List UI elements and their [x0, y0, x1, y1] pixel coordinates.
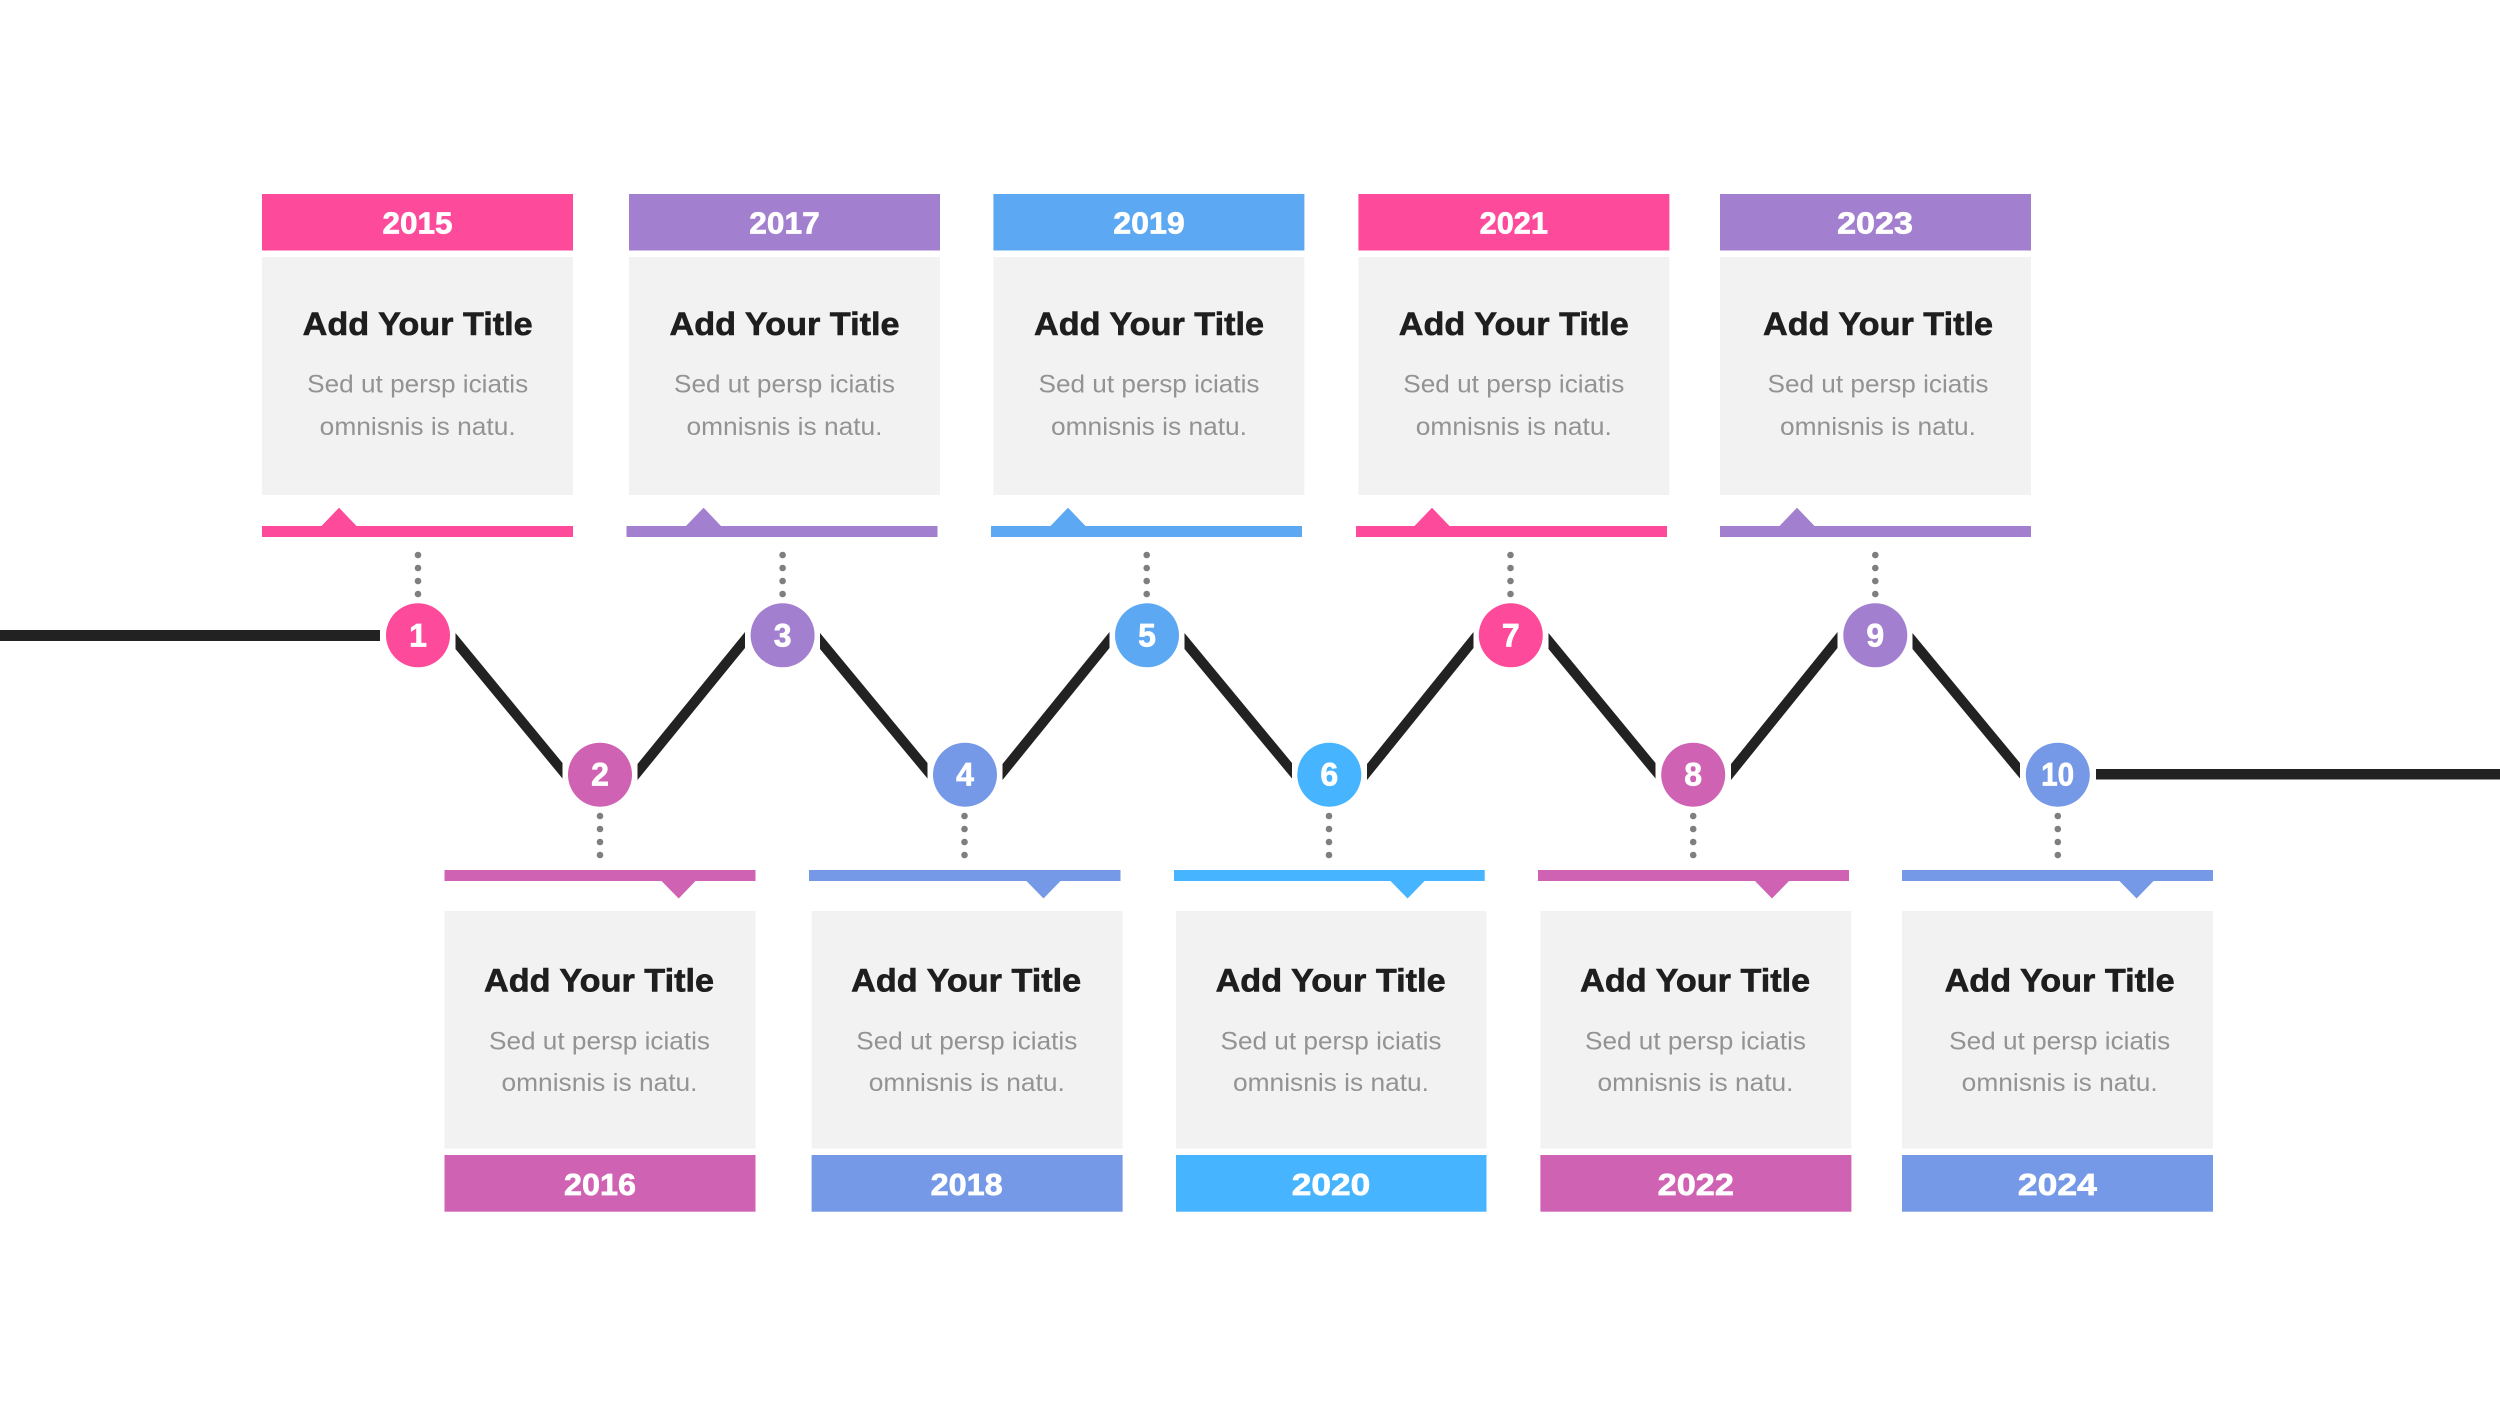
pointer bar 2016 [444, 870, 756, 898]
year header 2017 [629, 194, 940, 250]
year header 2021: 2021 [1480, 205, 1548, 240]
text panel 2021: omnisnis is natu. [1416, 413, 1612, 441]
year header 2016: 2016 [564, 1167, 636, 1202]
text panel 2016: Sed ut persp iciatis [489, 1027, 710, 1055]
text panel 2021: Sed ut persp iciatis [1403, 371, 1624, 399]
text panel 2015 [262, 257, 573, 495]
text panel 2017 [629, 257, 940, 495]
card 2022 [1538, 870, 1851, 1212]
marker 2 [568, 743, 632, 858]
year header 2021 [1358, 194, 1669, 250]
text panel 2015: omnisnis is natu. [320, 413, 516, 441]
card 2021 [1356, 194, 1669, 537]
timeline zigzag line [0, 630, 2500, 780]
text panel 2020 [1176, 911, 1486, 1148]
pointer bar 2019 [991, 508, 1302, 537]
marker 5 [1115, 552, 1179, 667]
pointer bar 2020 [1174, 870, 1485, 898]
text panel 2023: Add Your Title [1763, 306, 1993, 342]
marker 6 [1297, 743, 1361, 858]
text panel 2021: Add Your Title [1399, 306, 1629, 342]
pointer bar 2021 [1356, 508, 1667, 537]
text panel 2015: Sed ut persp iciatis [307, 371, 528, 399]
text panel 2023 [1720, 257, 2031, 495]
year header 2020 [1176, 1155, 1486, 1212]
text panel 2016 [444, 911, 756, 1148]
year header 2023 [1720, 194, 2031, 250]
marker 7: 7 [1502, 618, 1520, 654]
pointer bar 2023 [1720, 508, 2031, 537]
pointer bar 2024 [1902, 870, 2213, 898]
marker 3 [751, 552, 815, 667]
text panel 2018: omnisnis is natu. [869, 1069, 1065, 1097]
card 2020 [1174, 870, 1486, 1212]
marker 9: 9 [1866, 618, 1884, 654]
year header 2016 [444, 1155, 756, 1212]
marker 3: 3 [774, 618, 791, 654]
marker 9 [1843, 552, 1907, 667]
marker 5: 5 [1138, 618, 1156, 654]
marker 4: 4 [956, 756, 974, 792]
card 2018 [809, 870, 1123, 1212]
card 2019 [991, 194, 1304, 537]
text panel 2022: Add Your Title [1580, 963, 1810, 999]
year header 2015 [262, 194, 573, 250]
year header 2019 [993, 194, 1304, 250]
year header 2019: 2019 [1113, 205, 1185, 240]
card 2017 [626, 194, 940, 537]
card 2023 [1720, 194, 2031, 537]
year header 2023: 2023 [1837, 205, 1913, 240]
pointer bar 2018 [809, 870, 1120, 898]
text panel 2020: Add Your Title [1216, 963, 1446, 999]
pointer bar 2022 [1538, 870, 1849, 898]
year header 2020: 2020 [1292, 1167, 1370, 1202]
text panel 2022: Sed ut persp iciatis [1585, 1027, 1806, 1055]
text panel 2018: Add Your Title [851, 963, 1081, 999]
year header 2018 [812, 1155, 1123, 1212]
year header 2022 [1540, 1155, 1851, 1212]
text panel 2017: omnisnis is natu. [686, 413, 882, 441]
text panel 2020: omnisnis is natu. [1233, 1069, 1429, 1097]
card 2016 [444, 870, 756, 1212]
text panel 2023: omnisnis is natu. [1780, 413, 1976, 441]
year header 2024 [1902, 1155, 2213, 1212]
marker 4 [933, 743, 997, 858]
text panel 2017: Add Your Title [670, 306, 900, 342]
marker 8: 8 [1684, 756, 1702, 792]
marker 1: 1 [409, 618, 427, 654]
text panel 2019: Sed ut persp iciatis [1038, 371, 1260, 399]
pointer bar 2017 [626, 508, 938, 537]
marker 8 [1661, 743, 1725, 858]
card 2015 [262, 194, 573, 537]
card 2024 [1902, 870, 2213, 1212]
marker 7 [1479, 552, 1543, 667]
text panel 2016: Add Your Title [484, 963, 714, 999]
text panel 2019 [993, 257, 1304, 495]
text panel 2018 [812, 911, 1123, 1148]
text panel 2024 [1902, 911, 2213, 1148]
text panel 2020: Sed ut persp iciatis [1220, 1027, 1442, 1055]
text panel 2019: omnisnis is natu. [1051, 413, 1247, 441]
text panel 2022: omnisnis is natu. [1598, 1069, 1794, 1097]
pointer bar 2015 [262, 508, 573, 537]
text panel 2024: Sed ut persp iciatis [1949, 1027, 2170, 1055]
year header 2018: 2018 [931, 1167, 1003, 1202]
text panel 2022 [1540, 911, 1851, 1148]
text panel 2021 [1358, 257, 1669, 495]
text panel 2015: Add Your Title [303, 306, 533, 342]
marker 10: 10 [2041, 756, 2074, 792]
year header 2024: 2024 [2018, 1167, 2098, 1202]
marker 6: 6 [1320, 756, 1338, 792]
text panel 2024: Add Your Title [1945, 963, 2175, 999]
text panel 2017: Sed ut persp iciatis [674, 371, 895, 399]
year header 2022: 2022 [1658, 1167, 1734, 1202]
year header 2015: 2015 [382, 205, 452, 240]
year header 2017: 2017 [749, 205, 820, 240]
text panel 2024: omnisnis is natu. [1962, 1069, 2158, 1097]
text panel 2019: Add Your Title [1034, 306, 1264, 342]
marker 10 [2026, 743, 2090, 858]
text panel 2023: Sed ut persp iciatis [1768, 371, 1988, 399]
text panel 2016: omnisnis is natu. [502, 1069, 698, 1097]
marker 2: 2 [591, 756, 609, 792]
marker 1 [386, 552, 450, 667]
text panel 2018: Sed ut persp iciatis [856, 1027, 1077, 1055]
